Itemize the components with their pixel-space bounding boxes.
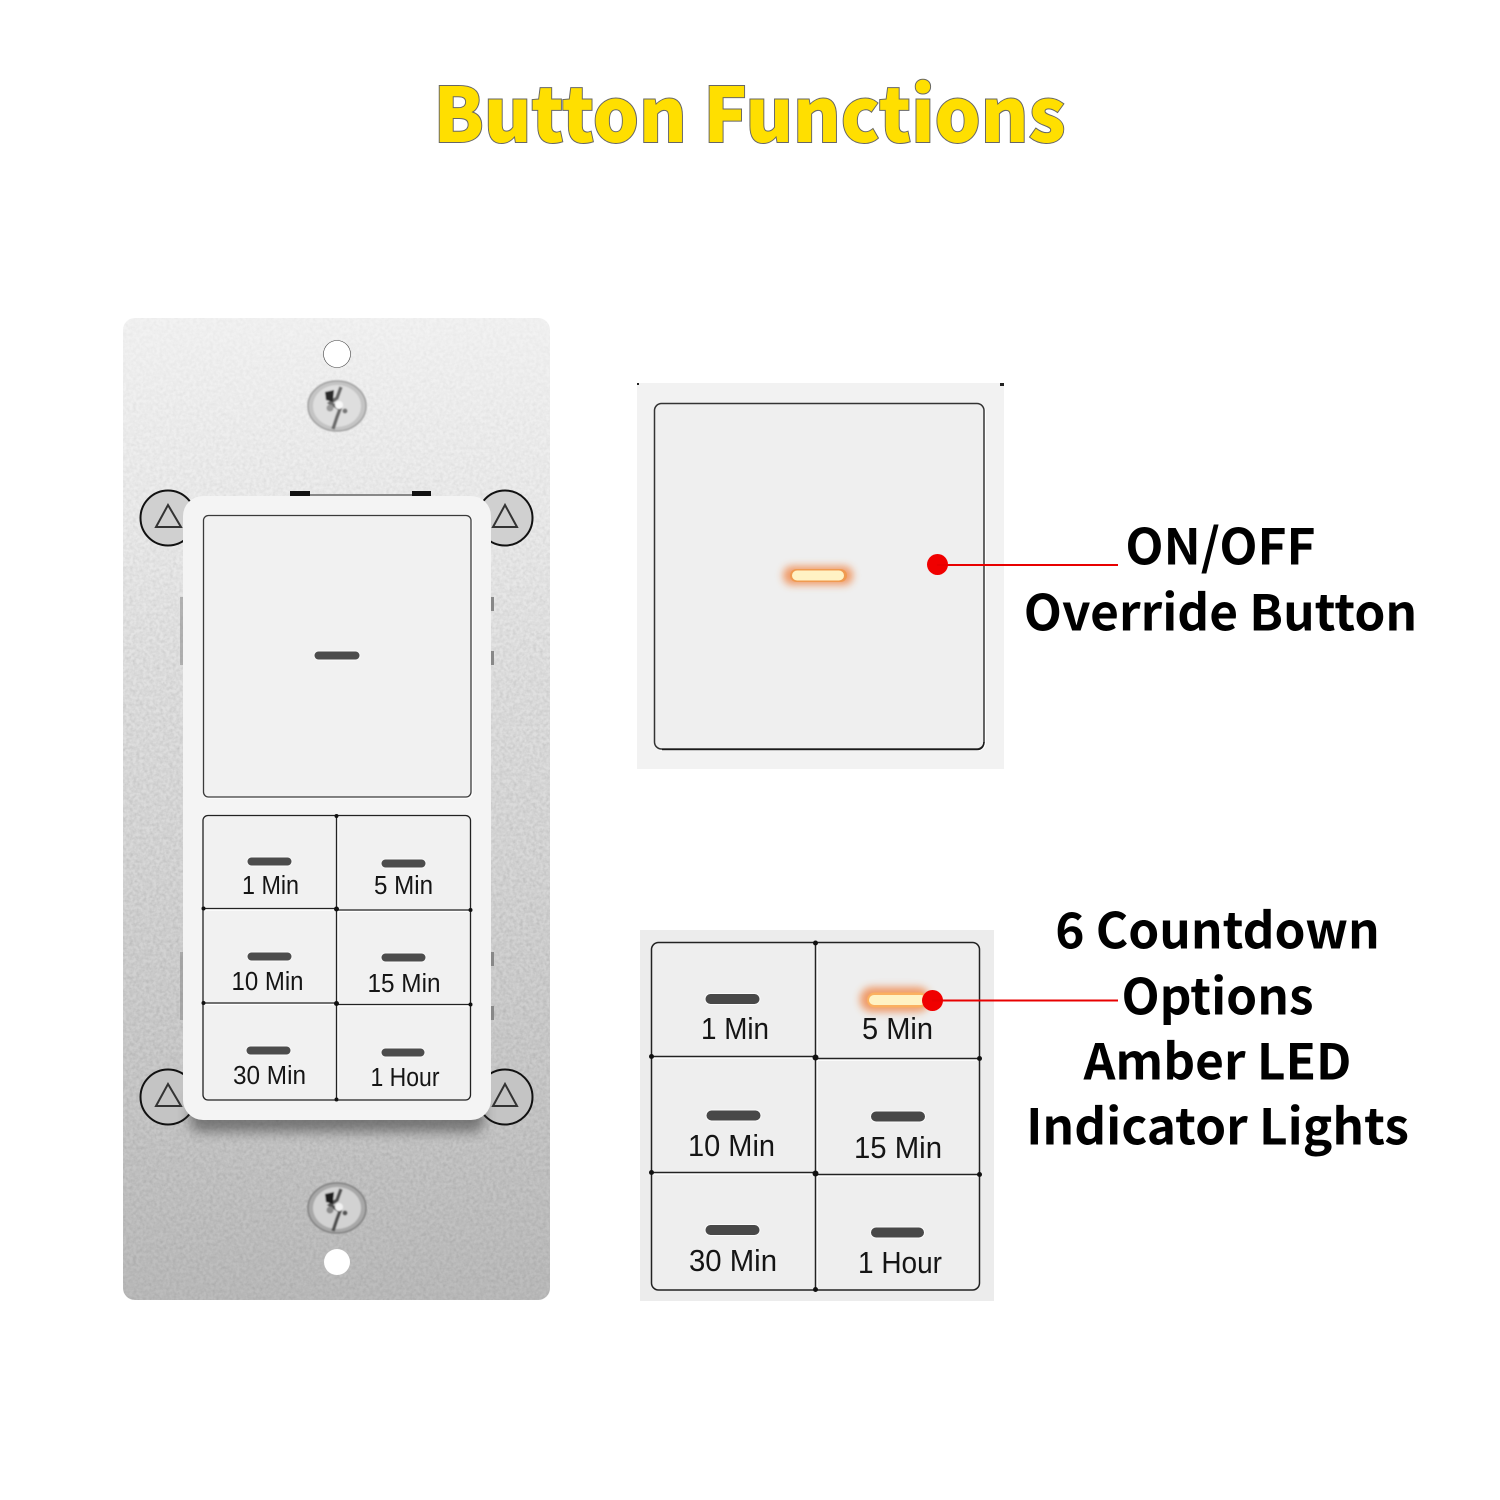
side notches: [180, 597, 494, 1020]
button labels: 30 Min: [689, 1244, 777, 1278]
text block: on/off override button: [1024, 508, 1417, 646]
button labels: 15 Min: [854, 1131, 942, 1165]
grid lines: [649, 940, 982, 1292]
countdown button grid: [202, 814, 472, 1102]
button grid: [652, 942, 980, 1290]
button labels: 10 Min: [688, 1129, 775, 1163]
title: Button Functions: [434, 55, 1066, 164]
text block: countdown options: Options: [1121, 958, 1314, 1030]
button labels: [688, 1012, 942, 1280]
countdown button grid: 15 Min: [368, 970, 440, 998]
text block: on/off override button: ON/OFF: [1125, 508, 1316, 580]
countdown button grid: 1 Hour: [370, 1064, 440, 1092]
icon: top mounting hole: [324, 340, 350, 368]
LED slots: [705, 994, 926, 1238]
icon: arrow circle top right: [478, 490, 532, 546]
top clips: [290, 491, 431, 497]
text block: countdown options: [1026, 892, 1409, 1160]
callout: on/off pointer: [927, 554, 1118, 575]
button labels: 1 Min: [701, 1012, 769, 1046]
amber LED: [783, 566, 853, 585]
panel: on/off override button close-up: [637, 383, 1004, 769]
button labels: 5 Min: [862, 1012, 933, 1046]
icon: bottom mounting hole: [324, 1249, 350, 1275]
labels: 1 Min: [242, 872, 299, 900]
icon: arrow circle bottom left: [140, 1070, 196, 1124]
button labels: 1 Hour: [858, 1246, 942, 1280]
device shadow: [190, 1094, 484, 1132]
panel: countdown options close-up: [640, 930, 994, 1301]
text block: countdown options: Amber LED: [1083, 1022, 1351, 1094]
icon: arrow circle bottom right: [478, 1070, 532, 1124]
wall plate: [123, 318, 550, 1300]
countdown button grid: 5 Min: [374, 872, 433, 900]
LED slots: [246, 857, 426, 1057]
amber LED 5 min: [860, 987, 930, 1012]
panel: full switch on wall plate: [123, 318, 550, 1300]
text block: countdown options: 6 Countdown: [1055, 892, 1380, 964]
text block: on/off override button: Override Button: [1024, 574, 1417, 646]
main override button: [204, 516, 472, 798]
icon: top screw: [308, 381, 366, 431]
indicator slot: [314, 651, 360, 660]
countdown button grid: 10 Min: [232, 968, 304, 996]
callout: countdown pointer: [922, 990, 1118, 1011]
icon: bottom screw: [308, 1183, 366, 1233]
switch body: [183, 496, 491, 1120]
text block: countdown options: Indicator Lights: [1026, 1088, 1409, 1160]
countdown button grid: 30 Min: [233, 1062, 306, 1090]
button outline: [654, 404, 985, 750]
icon: arrow circle top left: [140, 490, 196, 546]
